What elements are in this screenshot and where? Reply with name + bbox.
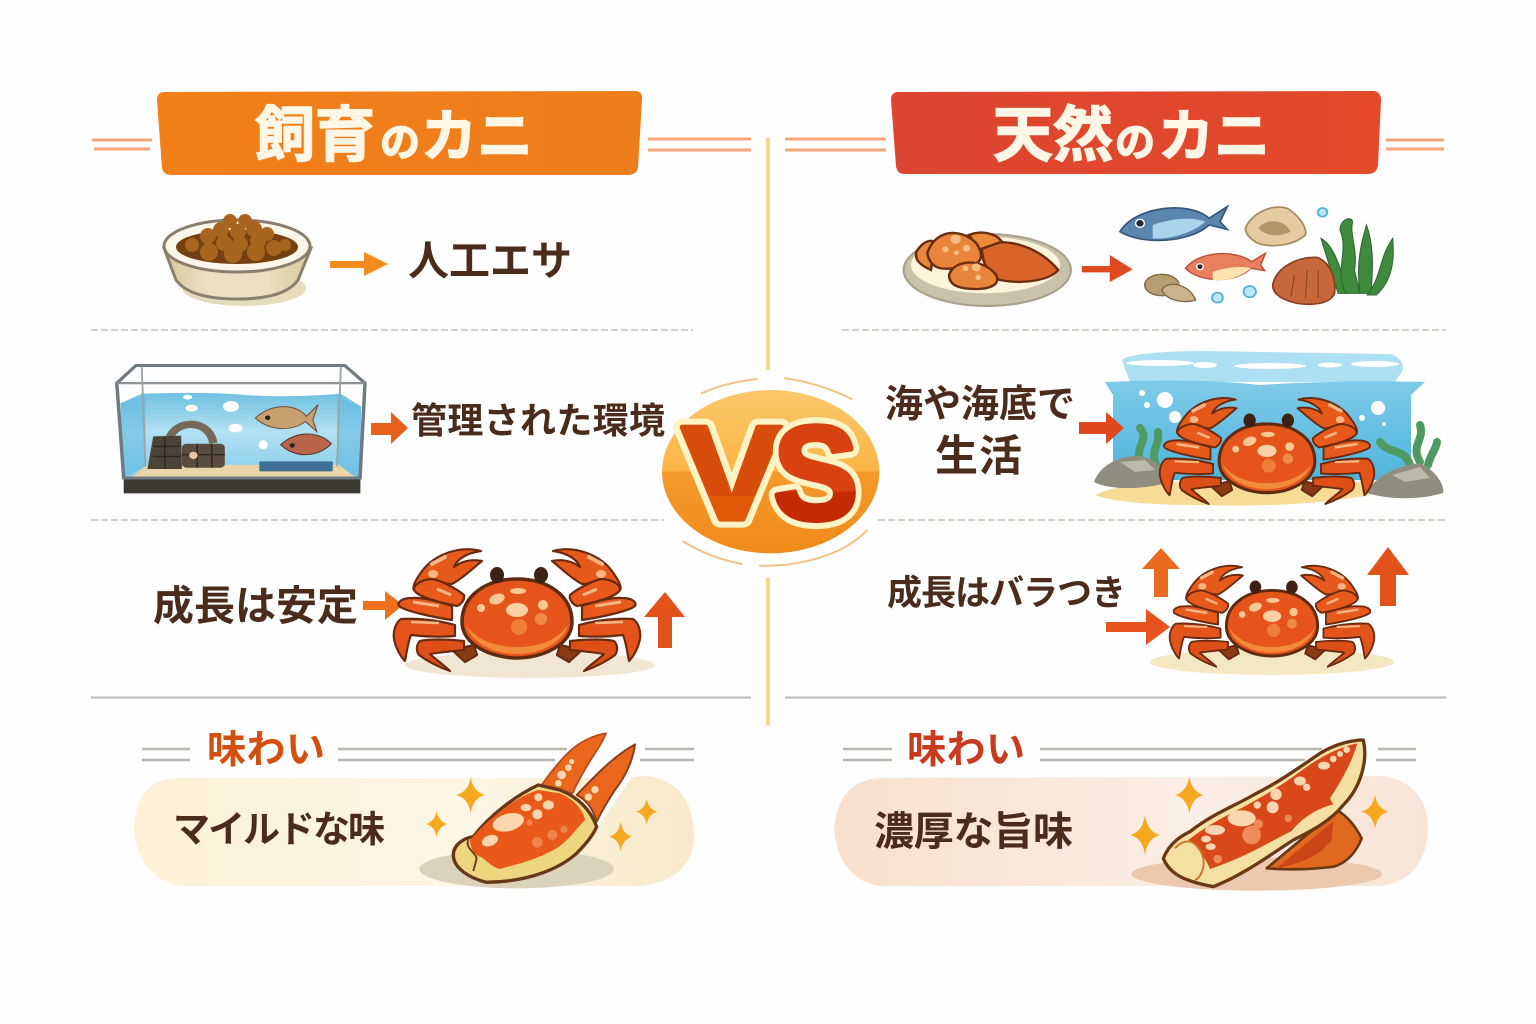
icon: clam — [1273, 257, 1335, 304]
VS lettering: V — [682, 399, 782, 548]
icon: crab leg meat — [1130, 740, 1389, 891]
taste section — [834, 729, 1428, 891]
arrow — [363, 591, 403, 620]
row: variable growth — [887, 547, 1409, 675]
label: uneven growth: 成長はバラつき — [887, 574, 1126, 613]
icon: blue fish — [1120, 207, 1227, 240]
heading: farmed crab: カニ — [421, 105, 533, 168]
icon: small shells — [1145, 274, 1196, 302]
label: lives in the sea: 海や海底で — [885, 384, 1075, 426]
sand shadow — [405, 652, 655, 678]
VS lettering: S — [773, 399, 858, 548]
label: taste: 味わい — [907, 729, 1025, 772]
heading: wild crab: 天然 — [993, 102, 1113, 169]
row dividers — [91, 330, 1446, 698]
panel: farmed crab — [92, 91, 751, 888]
heading: wild crab: の — [1115, 121, 1155, 165]
center divider line — [766, 138, 770, 725]
icon: feed bowl — [164, 214, 311, 306]
heading: wild crab — [891, 91, 1381, 174]
icon: bubbles — [1212, 208, 1327, 303]
arrow — [1082, 255, 1133, 282]
row: managed environment — [117, 365, 665, 493]
icon: crab on seabed — [1160, 398, 1374, 504]
arrow up — [1142, 548, 1180, 597]
icon: ocean scene — [1094, 351, 1443, 506]
taste pill — [134, 776, 694, 886]
title side lines — [92, 139, 751, 150]
icon: crab — [1170, 566, 1374, 667]
taste lines — [843, 749, 1416, 760]
taste section — [134, 729, 694, 888]
row: natural feed — [904, 207, 1393, 306]
VS lettering — [682, 399, 858, 548]
VS badge — [662, 378, 879, 566]
heading: farmed crab: の — [380, 121, 420, 165]
row: artificial feed — [164, 214, 572, 306]
icon: seaweed — [1321, 219, 1393, 295]
icon: tan shell — [1245, 207, 1306, 246]
label: managed environment: 管理された環境 — [411, 400, 665, 441]
row: stable growth — [153, 549, 685, 678]
arrow right — [1106, 609, 1170, 645]
sand shadow — [1150, 649, 1394, 675]
badge arcs — [683, 378, 867, 566]
label: stable growth: 成長は安定 — [153, 583, 358, 629]
VS lettering: S — [773, 399, 858, 548]
row: sea life — [885, 351, 1443, 506]
arrow up — [644, 592, 685, 648]
arrow — [330, 252, 388, 276]
heading: farmed crab: 飼育 — [255, 102, 375, 169]
icon: plate of food — [904, 233, 1071, 306]
label: mild flavor: マイルドな味 — [173, 809, 385, 850]
badge background — [662, 390, 879, 553]
title side lines — [785, 139, 1444, 150]
arrow — [371, 412, 408, 444]
panel: wild crab — [785, 91, 1444, 891]
label: rich umami: 濃厚な旨味 — [874, 810, 1073, 854]
heading: farmed crab — [157, 91, 642, 175]
label: lives in the sea — [885, 384, 1075, 481]
icon: red fish — [1185, 253, 1265, 280]
heading: wild crab: カニ — [1158, 105, 1270, 168]
icon: crab — [394, 549, 640, 671]
icon: claw — [419, 733, 657, 888]
taste pill — [834, 776, 1428, 886]
icon: aquarium — [117, 365, 365, 493]
VS lettering: V — [682, 399, 782, 548]
arrow — [1079, 412, 1124, 444]
arrow up — [1367, 547, 1409, 606]
label: lives in the sea: 生活 — [935, 433, 1022, 481]
label: artificial feed: 人工エサ — [408, 238, 572, 284]
taste lines — [142, 749, 694, 760]
label: taste: 味わい — [207, 729, 325, 772]
